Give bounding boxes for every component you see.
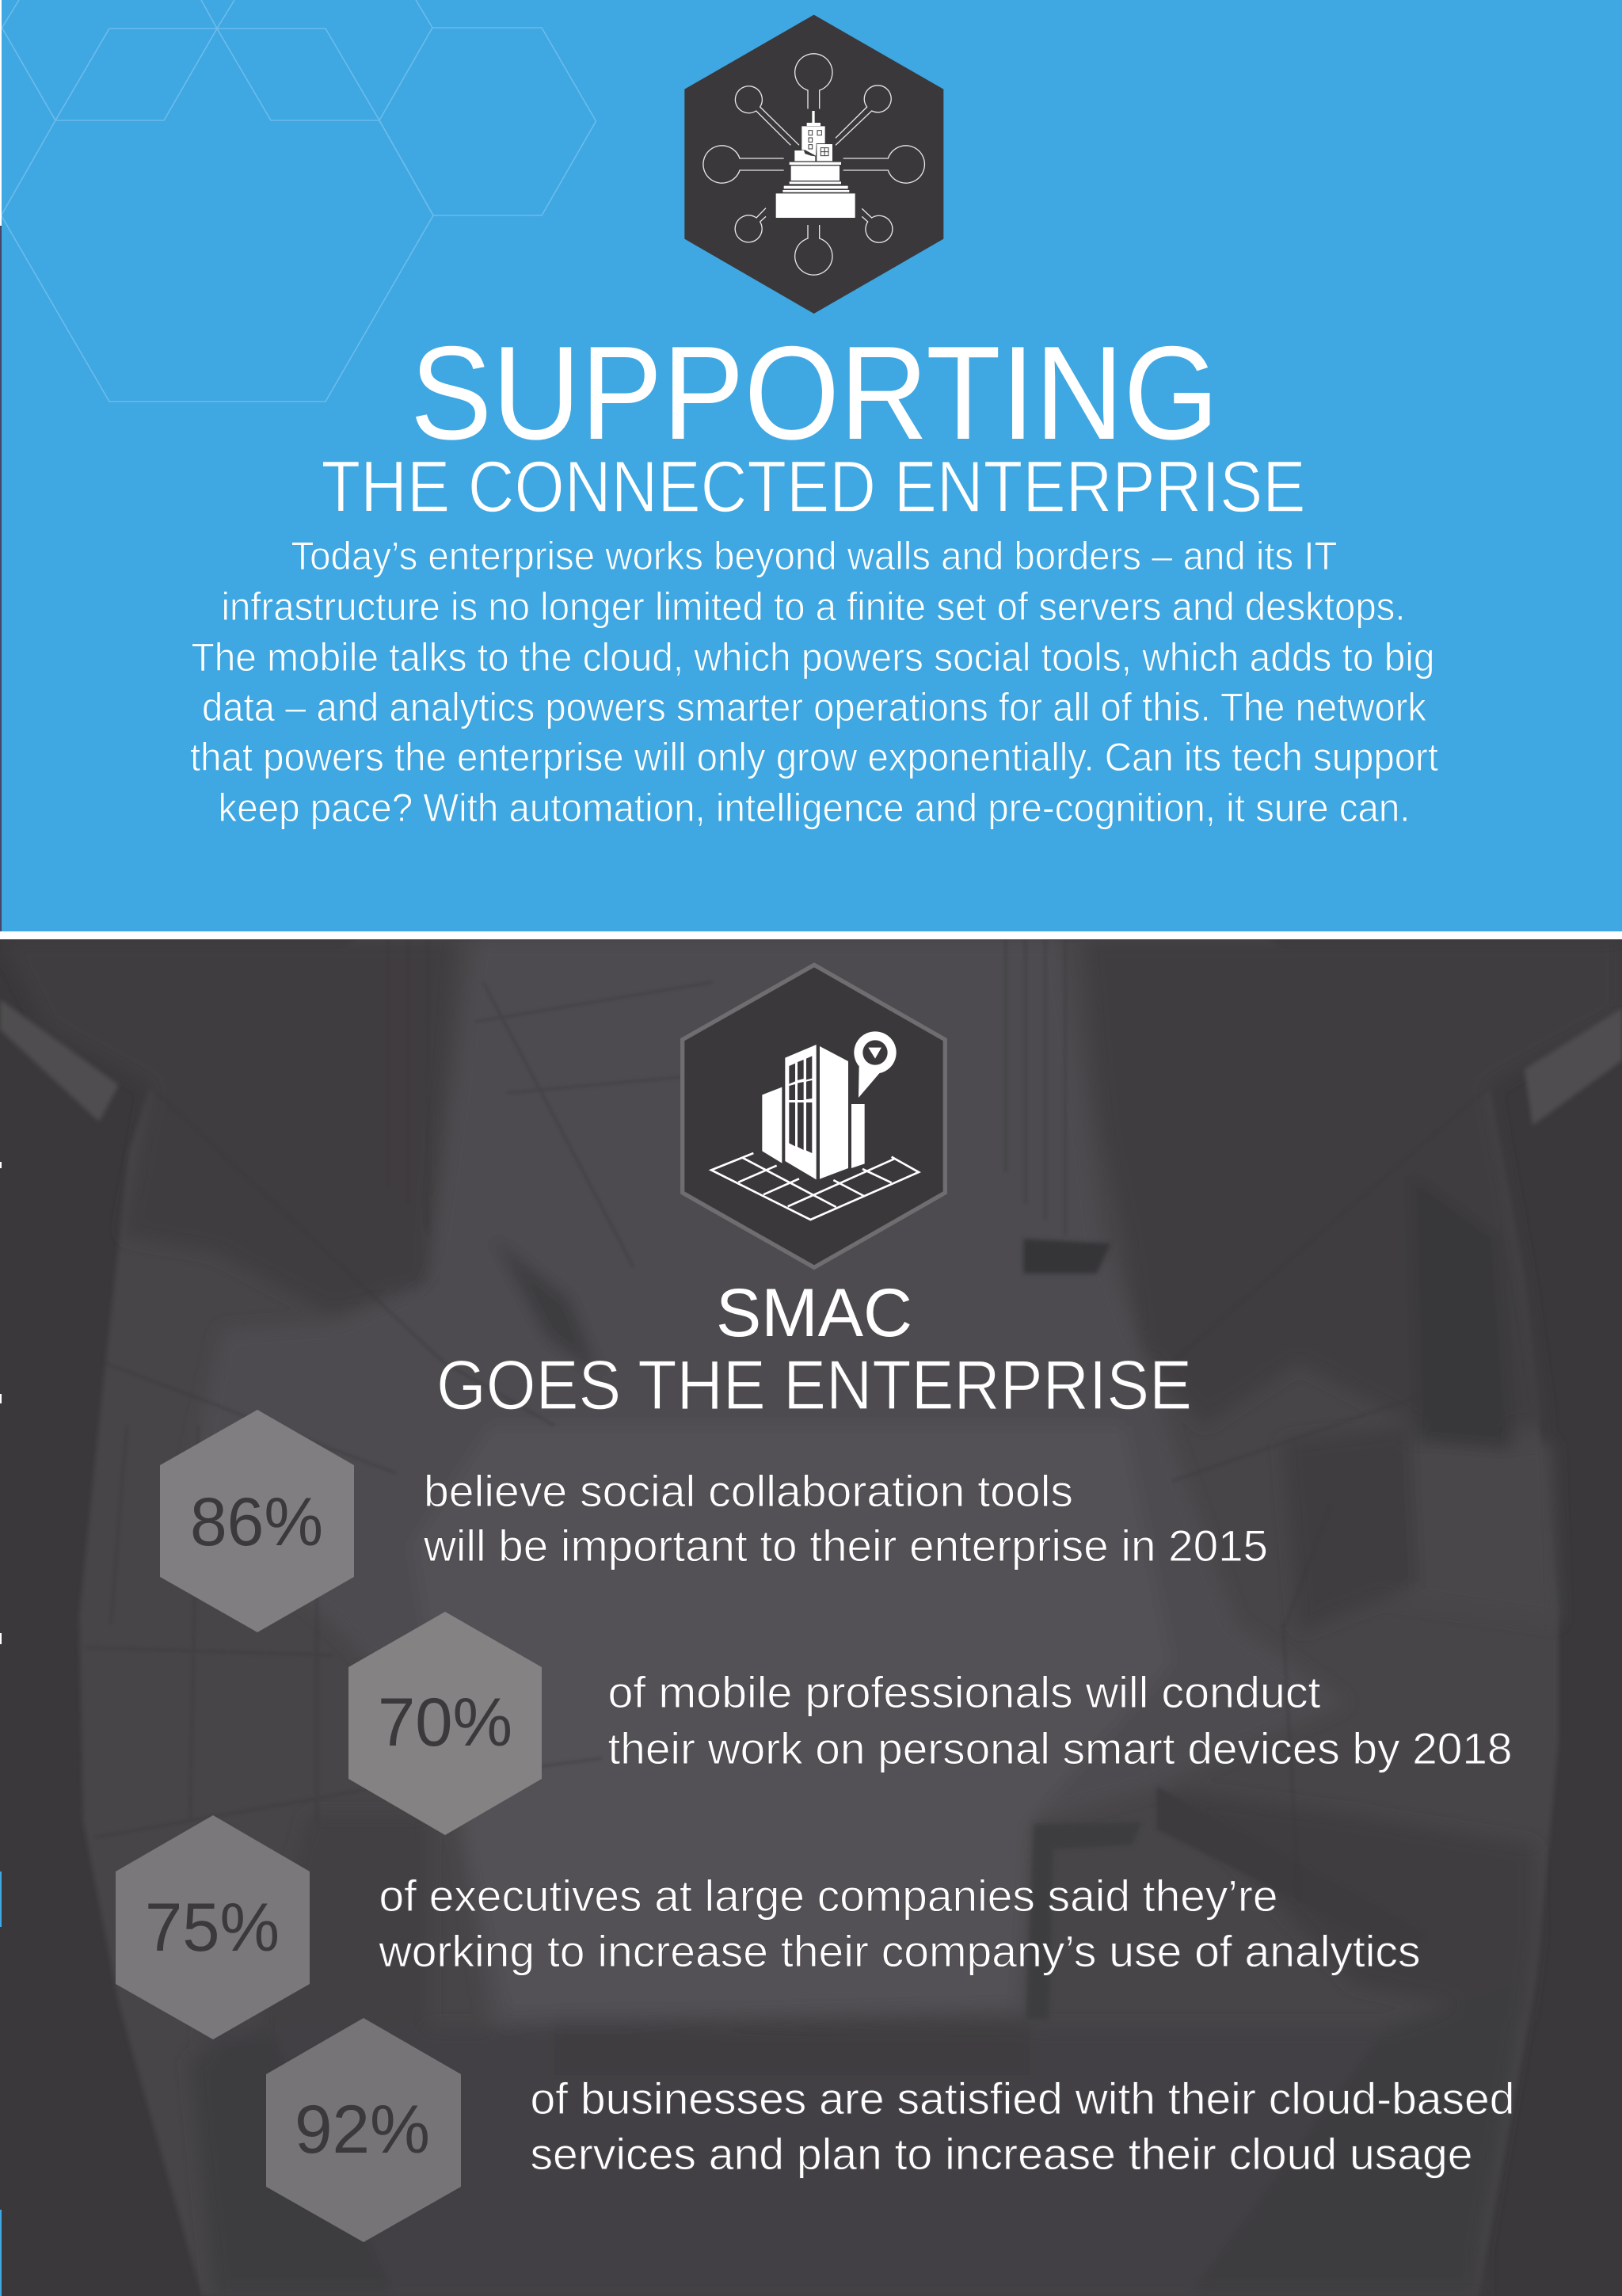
icon: building and location pin hexagon bbox=[683, 965, 945, 1267]
stat: 70 percent: of mobile professionals will conduct bbox=[608, 1667, 1321, 1717]
panel: blue header bbox=[0, 0, 1622, 931]
stat: 75 percent: 75% bbox=[145, 1890, 280, 1966]
intro paragraph: infrastructure is no longer limited to a finite set of servers and desktops. bbox=[222, 584, 1405, 629]
stat: 86 percent bbox=[160, 1410, 1268, 1632]
stat: 75 percent: of executives at large companies said they’re bbox=[379, 1871, 1278, 1921]
stat: 86 percent: 86% bbox=[190, 1484, 323, 1560]
stat: 92 percent: of businesses are satisfied with their cloud-based bbox=[531, 2073, 1514, 2123]
title: SUPPORTING bbox=[410, 318, 1219, 467]
stat: 75 percent: working to increase their company’s use of analytics bbox=[378, 1926, 1421, 1976]
intro paragraph: data – and analytics powers smarter operations for all of this. The network bbox=[202, 685, 1427, 729]
stat: 70 percent: their work on personal smart devices by 2018 bbox=[608, 1723, 1513, 1773]
background hexagon outlines bbox=[2, 0, 596, 402]
icon: connected enterprise hexagon bbox=[684, 15, 943, 314]
stat: 92 percent: 92% bbox=[295, 2092, 430, 2168]
intro paragraph: Today’s enterprise works beyond walls and borders – and its IT bbox=[291, 534, 1337, 578]
stat: 70 percent: 70% bbox=[378, 1685, 512, 1761]
intro paragraph: The mobile talks to the cloud, which powers social tools, which adds to big bbox=[192, 635, 1435, 680]
heading: goes the enterprise: GOES THE ENTERPRISE bbox=[436, 1346, 1192, 1424]
stat: 92 percent: services and plan to increase their cloud usage bbox=[531, 2129, 1473, 2179]
subtitle: THE CONNECTED ENTERPRISE bbox=[322, 447, 1305, 527]
intro paragraph: that powers the enterprise will only grow exponentially. Can its tech support bbox=[190, 735, 1438, 779]
stat: 86 percent: believe social collaboration tools bbox=[424, 1466, 1073, 1516]
background photo of data centre bbox=[0, 939, 1622, 2296]
heading: SMAC: SMAC bbox=[716, 1275, 912, 1351]
stat: 75 percent bbox=[116, 1815, 1421, 2039]
panel: SMAC dark section bbox=[0, 939, 1622, 2296]
stat: 86 percent: will be important to their enterprise in 2015 bbox=[423, 1521, 1268, 1571]
stat: 70 percent bbox=[348, 1612, 1513, 1835]
intro paragraph bbox=[190, 534, 1438, 830]
stat: 92 percent bbox=[266, 2018, 1514, 2242]
intro paragraph: keep pace? With automation, intelligence and pre-cognition, it sure can. bbox=[219, 786, 1410, 830]
